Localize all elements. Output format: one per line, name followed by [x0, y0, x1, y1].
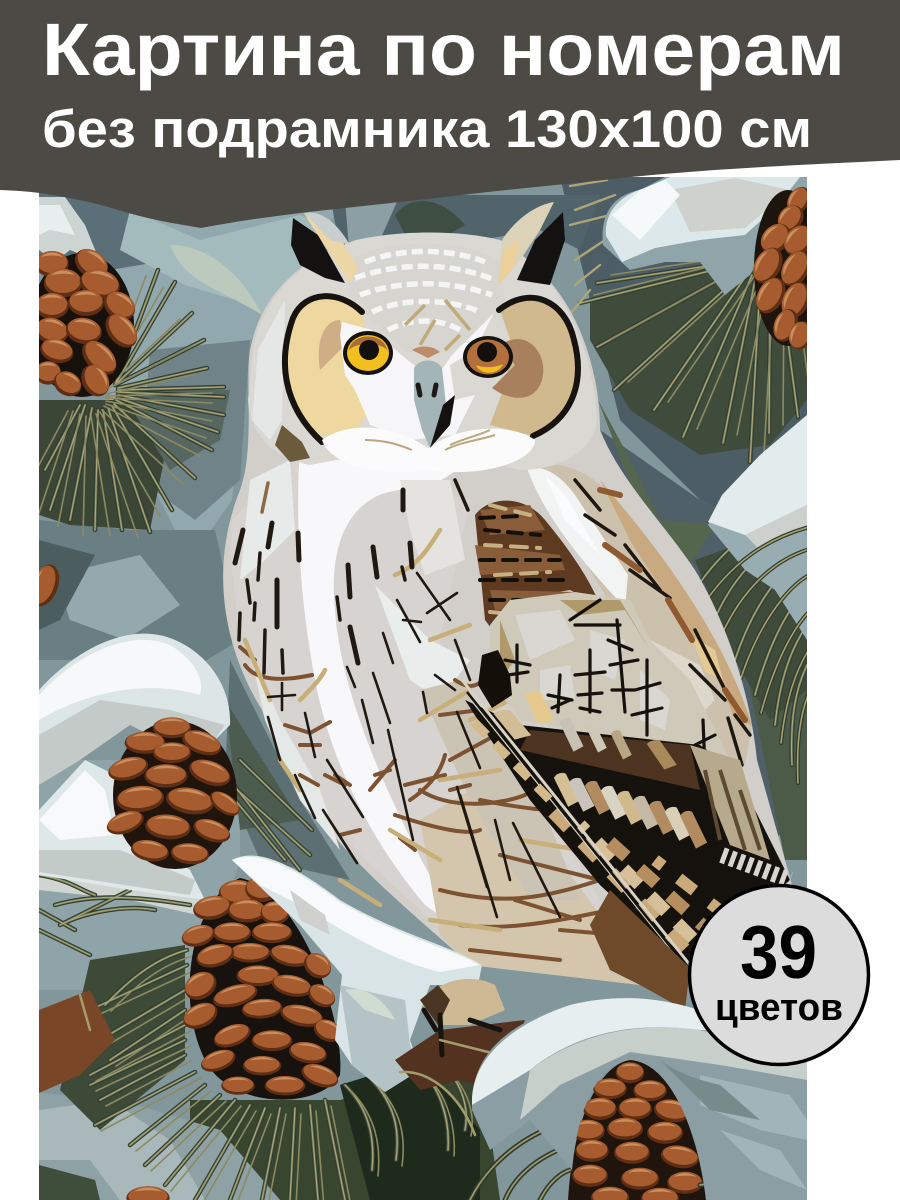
needles: back pine branches — [33, 180, 812, 1200]
header banner — [0, 0, 900, 228]
needles: pine branch backing — [39, 250, 807, 720]
painting: snowy owl on pine branches — [25, 177, 822, 1200]
snow: diagonal branch drift — [232, 856, 482, 1092]
owl: lower left face marks — [275, 425, 310, 462]
owl: facial disc rims — [285, 296, 578, 442]
owl: belly tan marks — [245, 530, 580, 930]
snow: right branch — [708, 415, 807, 640]
owl: right facial disc — [490, 298, 578, 437]
owl: talons — [420, 979, 505, 1055]
needles: right branch front — [708, 526, 807, 785]
pine cones — [25, 183, 822, 1200]
cone: left middle — [104, 717, 244, 869]
branch: left bark — [39, 990, 115, 1093]
owl: ear tufts — [291, 202, 565, 285]
snow: left drift — [39, 634, 230, 785]
badge: 39 colours — [690, 886, 868, 1064]
snow: bottom right mound — [472, 998, 807, 1200]
owl: left eye — [343, 331, 393, 375]
owl: belly bars — [240, 647, 620, 960]
branch: brown bark under talons — [395, 1020, 525, 1090]
badge number: 39 — [740, 910, 817, 994]
title: Картина по номерам — [42, 8, 845, 91]
owl: outer upper wing — [527, 464, 752, 765]
owl: cheeks ruff — [322, 428, 535, 472]
cone: top right — [753, 186, 807, 350]
cone: small bottom and edge pieces — [25, 561, 170, 1200]
snow: lower left drift — [39, 760, 205, 900]
owl: lower flank — [590, 890, 690, 1010]
owl: chest streaks — [235, 480, 560, 917]
background: blurred winter forest — [39, 177, 807, 1200]
owl: head — [248, 232, 597, 472]
snow: top left branch — [39, 197, 96, 255]
owl: mottled lower wing — [478, 592, 730, 770]
owl: right eye — [463, 336, 513, 378]
owl: beak — [412, 346, 455, 448]
subtitle: без подрамника 130x100 см — [42, 100, 812, 159]
needles: front branch — [80, 995, 778, 1200]
cone: top left — [39, 249, 138, 397]
badge label: цветов — [715, 987, 843, 1029]
cone: bottom right — [568, 1060, 706, 1200]
owl: brown wing patch — [475, 500, 596, 626]
owl: left facial disc — [288, 299, 366, 436]
snow: top right branch — [603, 177, 807, 295]
owl: brow and cheek white — [340, 313, 494, 440]
owl: body silhouette — [223, 235, 792, 985]
cone: large center left — [179, 876, 345, 1100]
owl: barred tail feathers — [462, 680, 790, 968]
